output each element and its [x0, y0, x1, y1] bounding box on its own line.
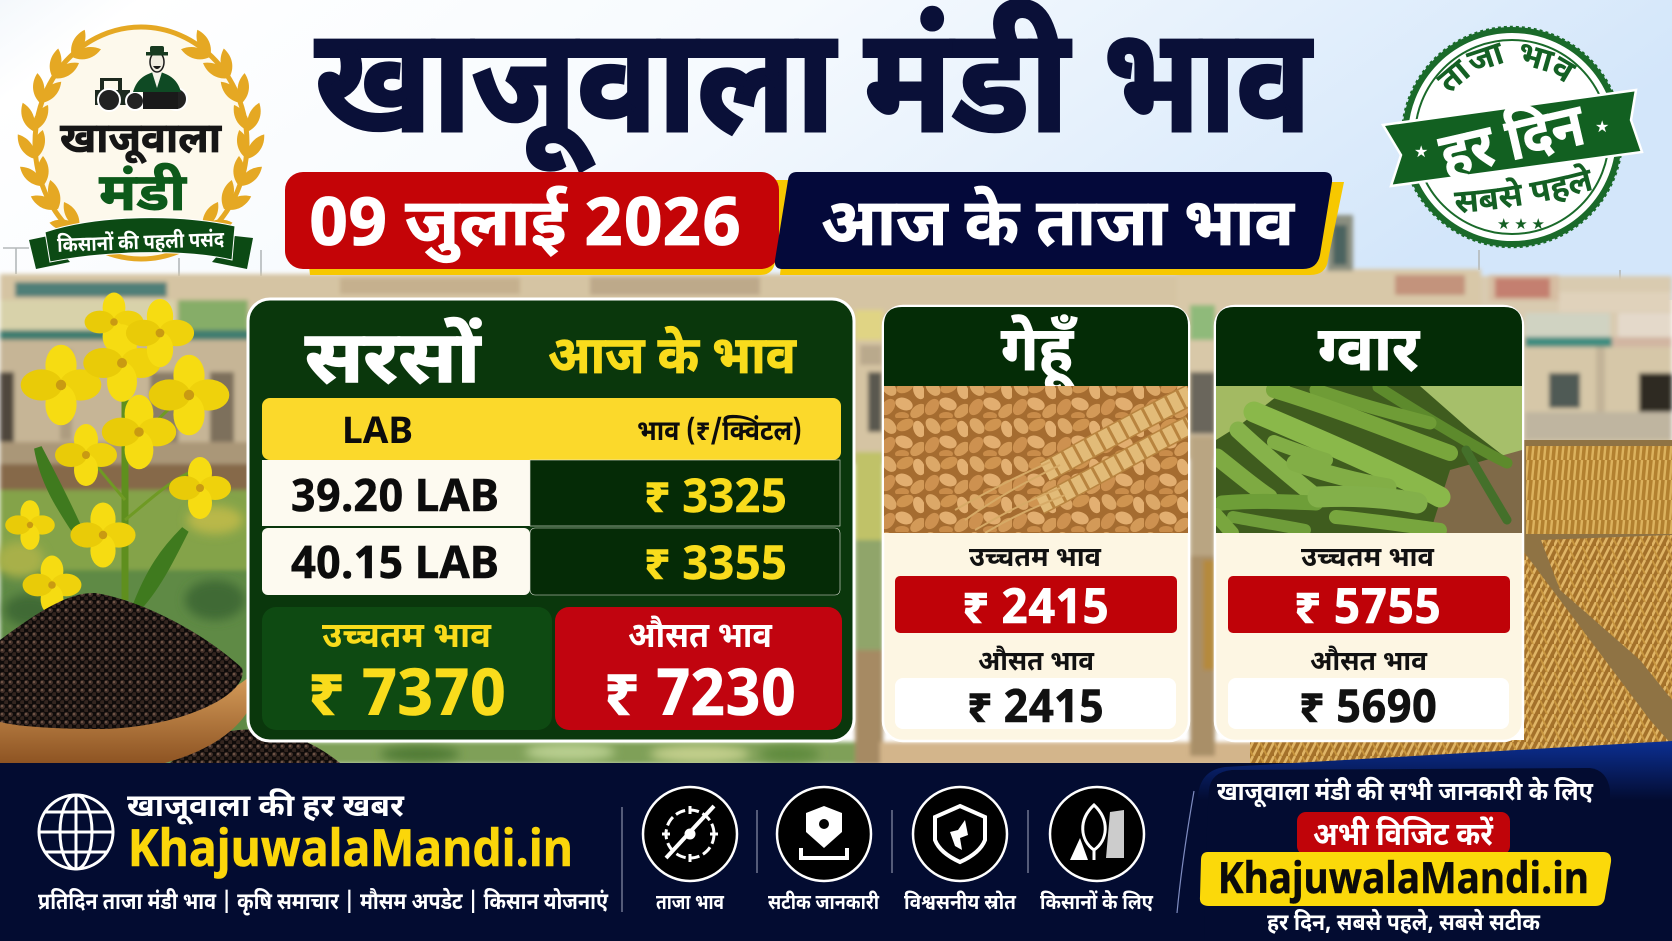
stamp: daily fresh prices: ★	[1595, 118, 1609, 139]
stamp stars: ★★★	[1497, 217, 1545, 236]
row 1: ₹ 3325	[644, 471, 787, 532]
row 2	[291, 538, 787, 599]
CTA visit button: अभी विजिट करें	[1313, 816, 1494, 859]
logo subtitle: मंडी	[99, 164, 188, 232]
wheat highest label: उच्चतम भाव	[969, 543, 1102, 578]
table header: भाव (₹/क्विंटल)	[637, 414, 802, 452]
guar highest price: ₹ 5755	[1294, 580, 1441, 643]
feature: fresh prices	[643, 787, 737, 918]
row 2: 40.15 LAB	[291, 539, 499, 597]
guar average label: औसत भाव	[1310, 646, 1428, 682]
stamp ribbon text: हर दिन	[1433, 91, 1594, 200]
guar header	[1216, 307, 1522, 386]
guar photo	[1216, 386, 1522, 533]
panel: guar	[1215, 306, 1523, 741]
feature: accurate info	[768, 787, 880, 918]
average price box: औसत भाव	[628, 615, 773, 662]
title	[315, 0, 1313, 191]
stamp ribbon	[1383, 90, 1642, 186]
footer band	[0, 763, 1672, 941]
wheat photo	[884, 386, 1190, 533]
table header: LAB	[342, 411, 413, 459]
stamp ribbon stars: ★	[1414, 143, 1428, 164]
logo wreath	[13, 27, 269, 234]
CTA website button: KhajuwalaMandi.in	[1218, 854, 1589, 911]
label: ताजा भाव	[656, 890, 724, 918]
call to action panel	[1177, 741, 1672, 941]
highest price box: उच्चतम भाव	[322, 617, 492, 662]
title: खाजूवाला	[315, 0, 838, 191]
highest price box: ₹ 7370	[308, 657, 506, 742]
label: विश्वसनीय स्रोत	[904, 890, 1017, 918]
stamp arc text	[1436, 42, 1592, 214]
logo ribbon: किसानों की पहली पसंद	[57, 227, 226, 261]
guar highest label: उच्चतम भाव	[1301, 543, 1435, 578]
label: किसानों के लिए	[1040, 890, 1154, 918]
mustard seed bowl	[0, 593, 340, 763]
logo farmer	[133, 46, 181, 92]
icon: compass	[643, 787, 737, 881]
footer brand block	[38, 788, 609, 919]
CTA heading: खाजूवाला मंडी की सभी जानकारी के लिए	[1217, 776, 1594, 811]
today's prices heading: आज के भाव	[548, 326, 798, 395]
panel: mustard prices	[248, 299, 854, 742]
brand website: KhajuwalaMandi.in	[128, 820, 573, 887]
feature: trusted source	[904, 787, 1017, 918]
average price box	[555, 607, 842, 742]
background: straw bales on the right	[1250, 440, 1672, 765]
feature: for farmers	[1040, 787, 1154, 918]
row 2: ₹ 3355	[644, 538, 787, 599]
icon: shield on book	[777, 787, 871, 881]
row 1: 39.20 LAB	[291, 472, 499, 530]
row 1	[291, 471, 787, 532]
guar average price	[1228, 678, 1509, 741]
wheat heading: गेहूँ	[1001, 313, 1077, 396]
background: blurred market buildings and fields	[0, 215, 1672, 766]
CTA inner panel	[1204, 768, 1610, 941]
CTA left edge line	[1177, 791, 1194, 913]
guar average price: ₹ 5690	[1299, 681, 1437, 741]
stamp circle	[1405, 30, 1619, 244]
highest price box	[262, 607, 552, 742]
CTA slogan: हर दिन, सबसे पहले, सबसे सटीक	[1267, 910, 1541, 940]
icon: shield with map	[913, 787, 1007, 881]
subtitle badge: आज के ताजा भाव	[821, 185, 1295, 272]
mustard heading: सरसों	[305, 317, 482, 412]
table header	[262, 398, 841, 460]
title: मंडी	[864, 0, 1072, 191]
logo tractor	[95, 78, 187, 111]
stamp inner ring	[1415, 40, 1609, 234]
table rows	[262, 460, 840, 599]
subtitle badge	[775, 172, 1344, 275]
wheat average price: ₹ 2415	[967, 681, 1104, 741]
icon: mustard flowers	[5, 293, 231, 614]
wheat highest price	[895, 576, 1177, 643]
icon: globe	[39, 795, 113, 869]
stamp arc text: ताजा भाव	[1436, 42, 1577, 91]
date badge: 09 जुलाई 2026	[309, 185, 741, 272]
logo ribbon	[29, 218, 253, 269]
logo cream badge	[35, 27, 247, 259]
wheat average price	[895, 678, 1176, 741]
icon: leaf and farmer	[1050, 787, 1144, 881]
background: sky	[0, 0, 1672, 300]
feature dividers	[622, 807, 1028, 912]
guar heading: ग्वार	[1318, 315, 1421, 396]
brand description: प्रतिदिन ताजा मंडी भाव | कृषि समाचार | मौसम अपडेट | किसान योजनाएं	[38, 889, 609, 919]
guar highest price	[1228, 576, 1510, 643]
title: भाव	[1103, 0, 1313, 191]
date badge	[285, 172, 789, 275]
stamp arc text: सबसे पहले	[1454, 163, 1592, 214]
background: mottled field and leaves	[0, 506, 820, 763]
stamp serrated edge	[1402, 27, 1622, 247]
wheat highest price: ₹ 2415	[962, 580, 1109, 643]
wheat header	[884, 307, 1188, 386]
stamp: daily fresh prices	[1381, 26, 1644, 248]
mustard plant	[5, 293, 231, 614]
blue wedge	[1198, 741, 1672, 800]
logo title: खाजूवाला	[60, 115, 222, 170]
logo: Khajuwala Mandi	[13, 27, 269, 269]
brand tagline: खाजूवाला की हर खबर	[127, 788, 405, 829]
sky poles	[3, 248, 1620, 292]
panel: wheat	[883, 306, 1190, 741]
wheat average label: औसत भाव	[978, 646, 1095, 682]
label: सटीक जानकारी	[768, 890, 880, 918]
average price box: ₹ 7230	[604, 657, 796, 742]
